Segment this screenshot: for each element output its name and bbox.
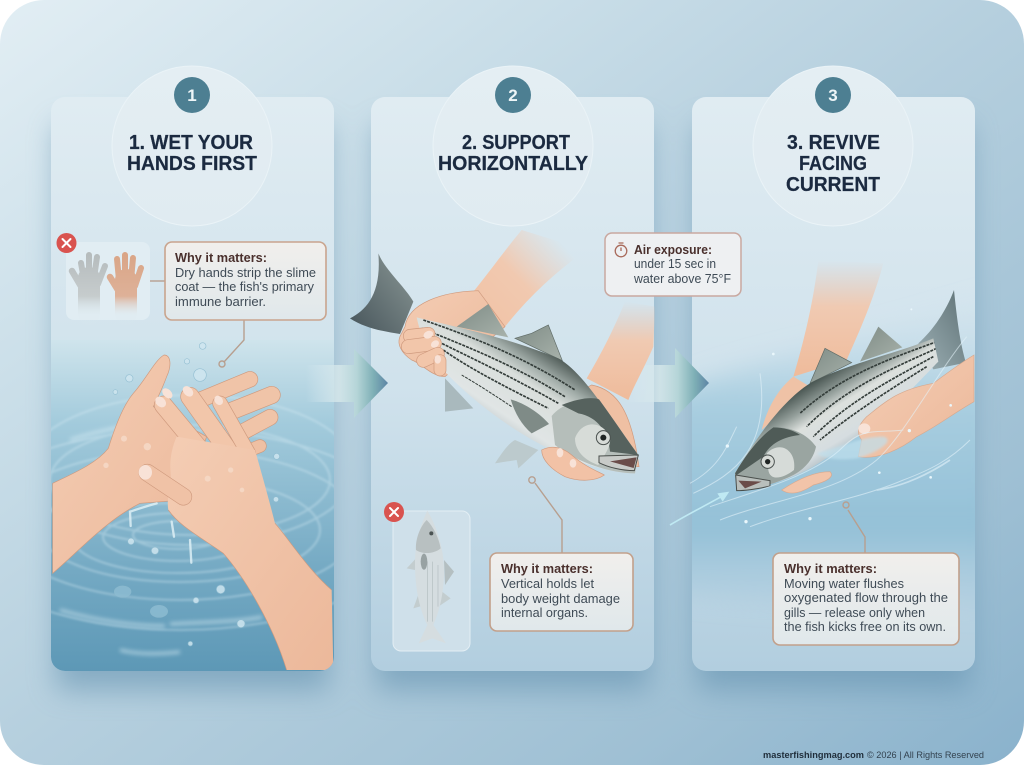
moving water <box>692 335 975 596</box>
tail fin <box>918 290 966 369</box>
callout: why it matters step 3: Moving water flushes <box>784 577 904 591</box>
title 2: HORIZONTALLY <box>438 153 589 175</box>
inset: dry hands warning <box>56 233 150 320</box>
header circle 2 <box>433 66 593 226</box>
title 2 <box>438 132 589 175</box>
callout: why it matters step 3: oxygenated flow through the <box>784 591 948 605</box>
callout: why it matters step 1 <box>165 242 326 320</box>
callout: air exposure: water above 75°F <box>633 272 731 286</box>
callout: why it matters step 3 <box>773 553 959 645</box>
water with ripples <box>51 350 334 671</box>
badge 2: 2 <box>508 86 518 105</box>
badge 2 <box>495 77 531 113</box>
head <box>735 427 816 491</box>
panel: step 1 wet your hands first <box>51 97 334 671</box>
arrow 1 <box>306 349 388 418</box>
panel: step 3 revive facing current <box>692 97 975 671</box>
near hand back and arm <box>168 437 333 670</box>
callout: why it matters step 1: immune barrier. <box>175 295 266 309</box>
callout: why it matters step 2: body weight damage <box>501 592 620 606</box>
callout: air exposure <box>605 233 741 296</box>
fingers under fish <box>782 472 831 493</box>
title 1: HANDS FIRST <box>127 153 257 175</box>
illustration: hands supporting striped bass horizontally <box>350 230 655 480</box>
icon: stopwatch <box>615 243 627 257</box>
title 3: 3. REVIVE <box>787 132 880 154</box>
icon: red x <box>384 502 404 522</box>
body <box>735 338 938 491</box>
icon: vertically held fish <box>407 511 454 643</box>
current streaks <box>690 337 970 527</box>
arrow 2 <box>627 348 709 418</box>
fingernails <box>422 329 576 468</box>
far hand fingers <box>200 379 272 450</box>
stripes <box>422 320 575 408</box>
dorsal fins <box>810 348 852 383</box>
water film over hand <box>817 437 888 459</box>
footer credit: masterfishingmag.com <box>763 750 864 761</box>
panel: step 2 support horizontally <box>371 97 654 671</box>
callout: why it matters step 1: coat — the fish's primary <box>175 280 315 294</box>
holding fingers <box>408 334 604 480</box>
far hand palm and arm <box>53 355 207 573</box>
illustration: hands reviving fish in current <box>670 260 974 527</box>
callout: why it matters step 3: gills — release only when <box>784 606 925 620</box>
header circle 3 <box>753 66 913 226</box>
dorsal fins <box>457 304 508 337</box>
footer credit <box>763 750 984 761</box>
pectoral fin <box>511 399 549 433</box>
title 3: FACING <box>799 153 867 175</box>
title 2: 2. SUPPORT <box>462 132 570 154</box>
thumb <box>147 473 183 497</box>
upper arm <box>473 230 587 327</box>
badge 3: 3 <box>828 86 838 105</box>
callout: air exposure: under 15 sec in <box>634 257 716 271</box>
lower fins <box>445 378 473 412</box>
tail fin <box>350 253 413 334</box>
footer credit: © 2026 | All Rights Reserved <box>867 750 984 761</box>
badge 3 <box>815 77 851 113</box>
icon: red x <box>56 233 76 253</box>
callout: why it matters step 3: the fish kicks free on its own. <box>784 620 946 634</box>
callout: why it matters step 1: Why it matters: <box>175 251 267 265</box>
title 3: CURRENT <box>786 174 880 196</box>
callout: why it matters step 2: Vertical holds let <box>501 577 595 591</box>
title 1 <box>127 132 257 175</box>
water drops <box>113 343 280 646</box>
callout: why it matters step 2: Why it matters: <box>501 562 593 576</box>
support hand right <box>858 355 974 457</box>
header circle 1 <box>112 66 272 226</box>
badge 1 <box>174 77 210 113</box>
leader lines <box>150 281 865 553</box>
callout: air exposure: Air exposure: <box>634 243 712 257</box>
title 1: 1. WET YOUR <box>129 132 254 154</box>
fingernail <box>858 423 870 434</box>
callout: why it matters step 2: internal organs. <box>501 606 588 620</box>
head <box>552 399 638 473</box>
icon: bare tan hand <box>110 255 141 314</box>
stripes <box>800 342 937 440</box>
icon: gray dry hand <box>72 255 105 314</box>
rear hand <box>582 385 639 467</box>
icon: two hands washing <box>53 343 333 670</box>
callout: why it matters step 2 <box>490 553 633 631</box>
title 3 <box>786 132 880 196</box>
reaching arm <box>793 260 883 377</box>
body <box>417 317 638 473</box>
lower arm <box>587 302 655 400</box>
inset: vertical hold warning <box>384 502 470 651</box>
badge 1: 1 <box>187 86 197 105</box>
near hand fingers <box>163 397 248 453</box>
current arrow <box>670 492 729 525</box>
panel shadows <box>56 125 970 690</box>
callout: why it matters step 3: Why it matters: <box>784 562 877 576</box>
callout: why it matters step 1: Dry hands strip the slime <box>175 266 316 280</box>
fingernails <box>139 384 225 480</box>
